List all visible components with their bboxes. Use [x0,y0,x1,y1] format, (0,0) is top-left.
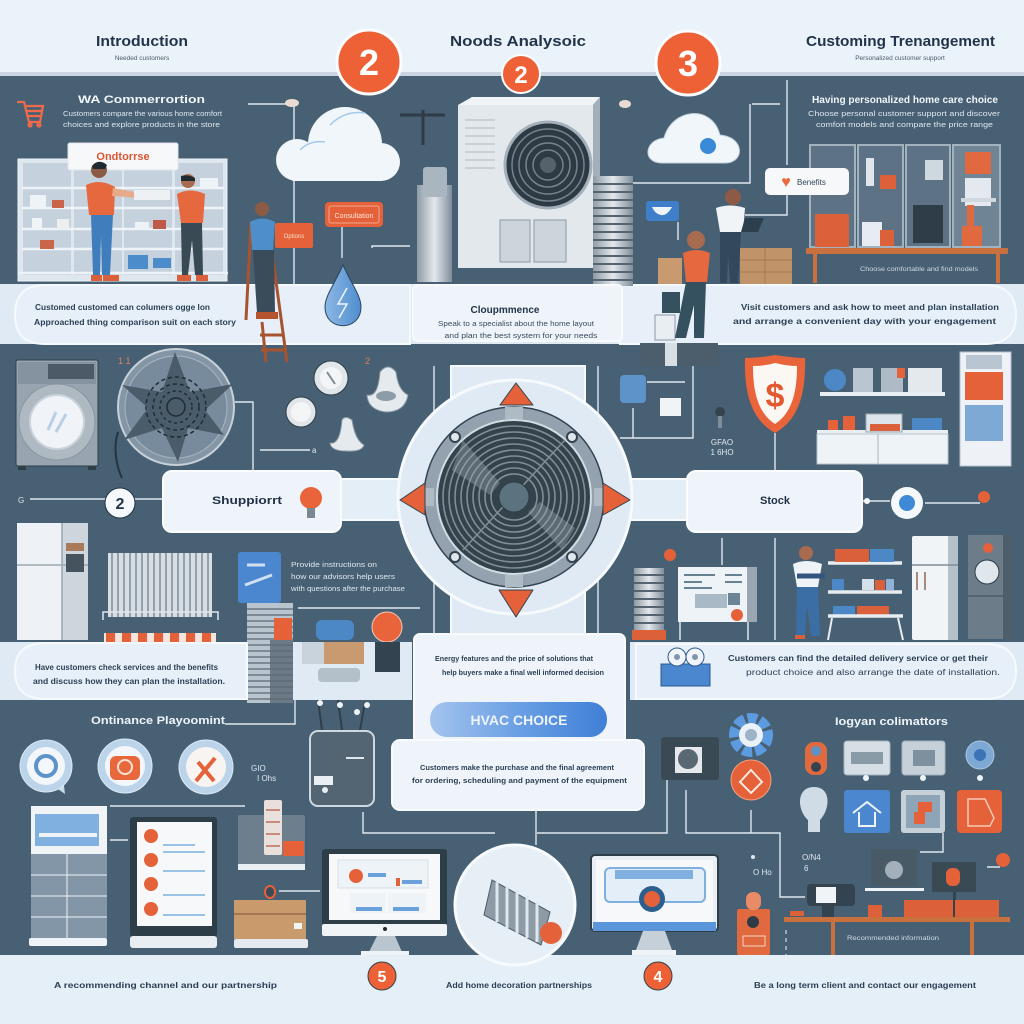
panel: lower left text band: Have customers check services and the benefits [35,662,218,672]
panel: lower right text band: product choice and also arrange the date of installation. [746,668,1000,677]
small chips [620,375,734,457]
text: right top: Having personalized home care choice [812,95,998,106]
panel: left text band: Customed customed can columers ogge lon [35,302,210,312]
panel: consultation: Speak to a specialist about the home layout [438,321,594,328]
small caption under right table: Choose comfortable and find models [860,267,978,273]
illustration: coil stack [593,176,633,286]
icon: camera box [661,737,719,780]
tag: heart [765,168,849,195]
illustration: store shelves and customers [18,143,228,281]
icon: cloud left [276,107,400,181]
illustration: file cabinet [29,806,107,946]
icon: shield: $ [766,377,785,415]
text: HVAC consideration: choices and explore products in the store [63,120,220,129]
icon: stock dial [864,487,990,519]
panel: stock: Stock [760,495,791,507]
heading: customer engagement: Personalized customer support [855,55,945,62]
tag: heart: ♥ [781,174,791,191]
panel: lower left text band [15,643,247,699]
panel: choice details: Customers make the purchase and the final agreement [420,763,614,772]
text: right top: comfort models and compare the price range [816,120,993,129]
heading: customer engagement [806,33,995,62]
illustration: outdoor AC unit [458,97,600,268]
text band bottom [0,642,1024,700]
heading: needs analysis: Noods Analysoic [450,33,586,50]
text: small marks: 1 1 [118,356,131,366]
panel: HVAC choice: help buyers make a final well informed decision [442,668,604,677]
illustration: stock items [632,535,1012,640]
text: small marks: 2 [365,356,370,366]
illustration: desk with devices [784,849,1010,955]
panel: support [163,471,341,532]
illustration: fridge left [17,523,88,640]
heading: introduction [96,33,188,62]
illustration: store shelves and customers: Ondtorrse [96,151,150,163]
connector lines [30,80,1000,897]
text: small marks [18,356,370,505]
illustration: tablet checklist [130,817,217,948]
panel: right text band: Visit customers and ask how to meet and plan installation [741,302,999,312]
text: HVAC consideration: Customers compare the various home comfort [63,109,223,118]
illustration: monitor left [322,849,447,955]
heading: introduction: Needed customers [115,55,170,62]
badge: 5 [368,962,396,990]
icon: shield [745,355,805,433]
heading: online placement: Ontinance Playoomint [91,715,225,727]
panel: choice details [392,740,644,810]
icon: cart [17,102,43,126]
panel: stock [687,471,862,532]
heading: customer engagement: Customing Trenangement [806,33,995,50]
text: right top: Choose personal customer support and discover [808,109,1001,118]
badge: 2 support [105,488,135,518]
text: HVAC consideration [63,94,223,129]
icons: small parts [286,361,408,451]
fan [424,407,604,587]
panel: consultation: and plan the best system for your needs [444,333,598,340]
panel: HVAC choice: Energy features and the price of solutions that [435,654,593,663]
label tag: Consultation [335,213,374,220]
badge: 3: 3 [678,43,698,84]
illustration: worker on ladder [246,202,313,362]
small note right: 6 [804,864,809,873]
illustration: filter tower [238,552,293,703]
tag: blue [646,201,679,221]
heading: introduction: Introduction [96,33,188,50]
text: small marks: a [312,446,317,455]
text band top [0,284,1024,344]
icon: orange diamond [731,760,771,800]
small note [251,764,276,783]
illustration: monitor right [591,855,718,955]
badge: 5: 5 [378,969,387,986]
illustration: router [310,700,374,806]
panel: HVAC choice: HVAC CHOICE [471,712,567,728]
small chips: 1 6HO [710,448,734,457]
panel: right text band [620,285,1016,344]
illustration: workers with boxes [640,189,792,366]
icon grid right [800,741,1002,833]
icon: lock [737,892,770,955]
icon: eye box [661,648,710,686]
illustration: central filter circle [455,845,575,965]
icon: water drop [325,265,361,326]
text: support notes: Provide instructions on [291,562,377,569]
small note right [751,853,821,877]
central hub [340,366,700,646]
small parts on band [302,612,402,682]
text: right top [808,95,1001,129]
text: HVAC consideration: WA Commerrortion [78,94,205,106]
icon: top bracket [285,99,631,108]
tag: heart: Benefits [797,178,826,187]
icon: gear [735,719,767,751]
badge: 2 large [337,30,401,94]
badge: 2 small [502,55,540,93]
panel: lower right text band: Customers can find the detailed delivery service or get their [728,653,989,663]
panel: choice details: for ordering, scheduling and payment of the equipment [412,776,628,785]
illustration: shelves and cabinet [817,352,1011,466]
illustration: radiator [103,553,218,642]
text: support notes [290,562,405,593]
illustration: worker on ladder: Options [284,234,304,240]
panel: left text band [15,285,410,344]
panel: left text band: Approached thing comparison suit on each story [34,317,236,327]
illustration: wall fan [115,349,234,478]
panel: consultation: Cloupmmence [471,305,540,316]
illustration: store shelves right [806,145,1008,283]
badge: 2 large: 2 [359,42,379,83]
icon: cloud right [648,114,739,163]
footer text right: Be a long term client and contact our engagement [754,981,976,990]
small chips: GFAO [711,438,733,447]
panel: HVAC choice [414,634,625,744]
badge: 2 small: 2 [514,62,528,89]
label tag [325,202,383,227]
badge: 4: 4 [654,969,663,986]
badge: 3 [656,31,720,95]
footer text left: A recommending channel and our partnership [54,981,277,990]
panel: lower right text band [636,644,1016,699]
small caption under desk: Recommended information [847,936,939,942]
icons: round trio [20,739,233,794]
small note: I Ohs [257,774,276,783]
small note right: O Ho [753,868,772,877]
small note right: O/N4 [802,853,821,862]
text: small marks: G [18,496,24,505]
illustration: cylinder tank [400,110,452,282]
small note: GIO [251,764,266,773]
badge: 2 support: 2 [116,496,125,513]
illustration: washer [16,360,98,470]
badge: 4 [644,962,672,990]
panel: lower left text band: and discuss how they can plan the installation. [33,676,225,686]
text: support notes: how our advisors help users [291,574,396,581]
text: support notes: with questions after the purchase [290,586,405,593]
panel: right text band: and arrange a convenient day with your engagement [733,316,996,326]
footer band [0,955,1024,1024]
panel: support: Shuppiorrt [212,495,282,507]
header band [0,0,1024,76]
heading: login information: Iogyan colimattors [835,716,948,728]
footer text middle: Add home decoration partnerships [446,981,593,990]
panel: consultation [413,285,622,341]
illustration: device with paper and box [234,800,308,948]
